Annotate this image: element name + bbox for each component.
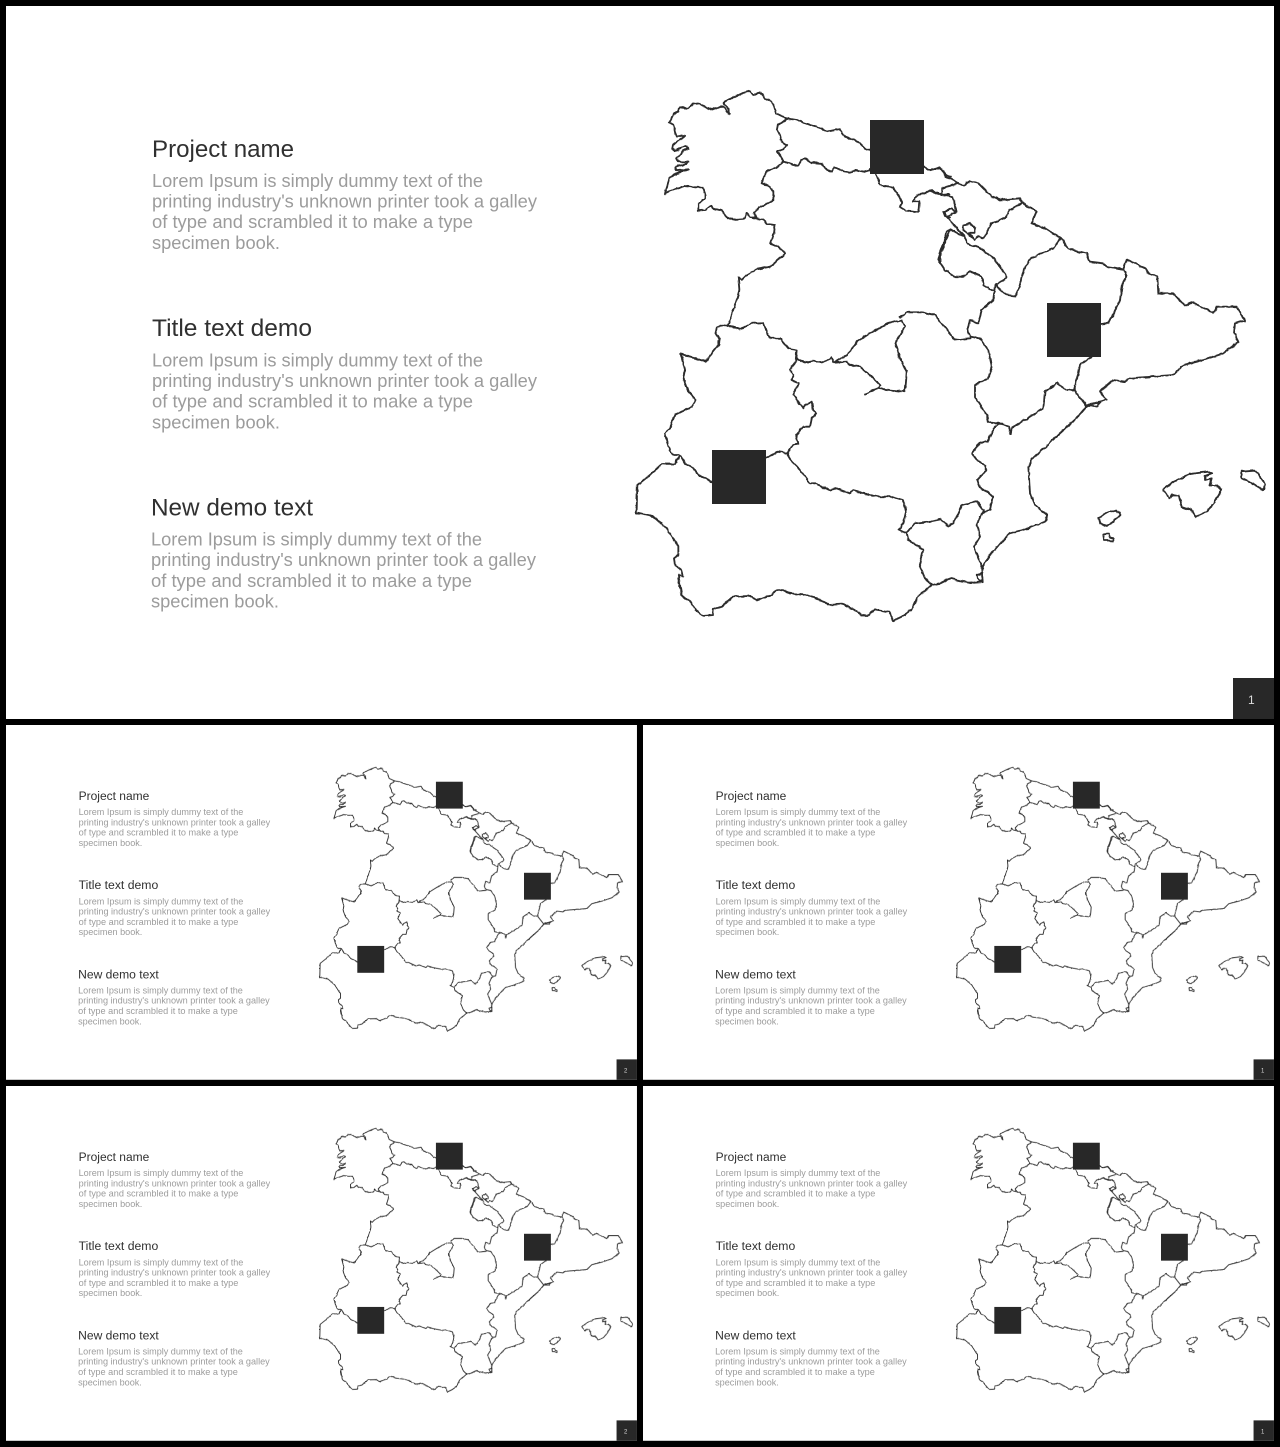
marker square north — [436, 1143, 463, 1170]
text block: new demo text: specimen book. — [78, 1016, 142, 1026]
marker square east — [1047, 303, 1101, 357]
text block: new demo text: printing industry's unknown printer took a galley — [715, 996, 907, 1006]
marker square north — [1073, 1143, 1100, 1170]
text block: title text demo: Title text demo — [79, 1239, 159, 1253]
text block: project name: Lorem Ipsum is simply dummy text of the — [716, 1168, 880, 1178]
text block: new demo text: of type and scrambled it to make a type — [151, 571, 472, 591]
text block: new demo text: New demo text — [78, 968, 159, 982]
text block: project name: Lorem Ipsum is simply dummy text of the — [79, 1168, 243, 1178]
panel: small slide top right — [643, 725, 1274, 1080]
text block: project name: Project name — [716, 789, 787, 803]
text block: project name: Lorem Ipsum is simply dummy text of the — [716, 807, 880, 817]
text block: project name: printing industry's unknown printer took a galley — [716, 817, 908, 827]
text block: title text demo — [152, 315, 537, 432]
text block: title text demo: Title text demo — [716, 878, 796, 892]
page number badge — [1233, 678, 1274, 719]
text block: new demo text: New demo text — [78, 1329, 159, 1343]
text block: title text demo: of type and scrambled it to make a type — [152, 392, 473, 412]
text block: title text demo: of type and scrambled it to make a type — [79, 917, 238, 927]
text block: project name: specimen book. — [716, 1199, 779, 1209]
text block: new demo text: of type and scrambled it to make a type — [78, 1006, 238, 1016]
text block: title text demo: printing industry's unknown printer took a galley — [716, 1268, 908, 1278]
text block: title text demo: Title text demo — [152, 315, 312, 342]
map of Spain — [956, 767, 1269, 1031]
page number badge — [1254, 1059, 1274, 1080]
text block: project name: printing industry's unknown printer took a galley — [152, 192, 537, 212]
text block: title text demo: Title text demo — [79, 878, 159, 892]
text block: project name: specimen book. — [79, 838, 142, 848]
page number badge: 1 — [1261, 1068, 1265, 1074]
text block: project name: of type and scrambled it to make a type — [152, 212, 473, 232]
text block: project name: Project name — [716, 1150, 787, 1164]
text block: project name: printing industry's unknown printer took a galley — [79, 1178, 271, 1188]
text block: title text demo: of type and scrambled it to make a type — [716, 1278, 875, 1288]
text block: title text demo: printing industry's unknown printer took a galley — [79, 907, 271, 917]
text block: new demo text: of type and scrambled it to make a type — [78, 1367, 238, 1377]
text block: project name: printing industry's unknown printer took a galley — [716, 1178, 908, 1188]
text block: title text demo — [79, 878, 271, 937]
map of Spain — [319, 767, 632, 1031]
panel: main slide — [6, 6, 1274, 719]
text block: new demo text: specimen book. — [715, 1377, 779, 1387]
text block: new demo text: Lorem Ipsum is simply dummy text of the — [151, 530, 482, 550]
text block: new demo text — [78, 1329, 270, 1387]
text block: title text demo — [716, 1239, 908, 1298]
panel: small slide bottom left — [6, 1086, 637, 1441]
text block: project name: of type and scrambled it to make a type — [79, 827, 238, 837]
text block: title text demo: specimen book. — [716, 927, 779, 937]
text block: title text demo: Lorem Ipsum is simply dummy text of the — [79, 1257, 243, 1267]
marker square north — [870, 120, 924, 174]
marker square east — [524, 873, 551, 900]
marker square southwest — [994, 946, 1021, 973]
text block: new demo text: New demo text — [715, 968, 796, 982]
text block: project name: Project name — [79, 789, 150, 803]
text block: new demo text: Lorem Ipsum is simply dummy text of the — [715, 1346, 880, 1356]
text block: new demo text: printing industry's unknown printer took a galley — [78, 996, 270, 1006]
text block: new demo text: Lorem Ipsum is simply dummy text of the — [78, 1346, 243, 1356]
marker square southwest — [994, 1307, 1021, 1334]
page number badge: 2 — [624, 1429, 628, 1435]
text block: new demo text: specimen book. — [78, 1377, 142, 1387]
page number badge — [617, 1059, 637, 1080]
page number badge — [617, 1420, 637, 1441]
text block: project name: Project name — [152, 136, 294, 163]
text block: title text demo: printing industry's unknown printer took a galley — [716, 907, 908, 917]
text block: title text demo: of type and scrambled it to make a type — [79, 1278, 238, 1288]
text block: project name: Lorem Ipsum is simply dummy text of the — [152, 171, 483, 191]
text block: project name — [79, 789, 271, 848]
text block: title text demo: Title text demo — [716, 1239, 796, 1253]
text block: new demo text: Lorem Ipsum is simply dummy text of the — [715, 985, 880, 995]
text block: new demo text: specimen book. — [151, 592, 279, 612]
text block: new demo text: printing industry's unknown printer took a galley — [151, 550, 536, 570]
text block: new demo text: of type and scrambled it to make a type — [715, 1006, 875, 1016]
text block: project name — [79, 1150, 271, 1209]
marker square east — [1161, 873, 1188, 900]
text block: new demo text: of type and scrambled it to make a type — [715, 1367, 875, 1377]
marker square southwest — [712, 450, 766, 504]
text block: project name: specimen book. — [152, 233, 280, 253]
marker square north — [436, 782, 463, 809]
text block: title text demo — [79, 1239, 271, 1298]
text block: new demo text: New demo text — [151, 494, 313, 522]
text block: title text demo: specimen book. — [79, 1288, 142, 1298]
text block: new demo text: Lorem Ipsum is simply dummy text of the — [78, 985, 243, 995]
text block: title text demo: Lorem Ipsum is simply dummy text of the — [716, 1257, 880, 1267]
text block: title text demo: of type and scrambled it to make a type — [716, 917, 875, 927]
text block: title text demo: specimen book. — [716, 1288, 779, 1298]
text block: title text demo: Lorem Ipsum is simply dummy text of the — [152, 350, 483, 370]
text block: new demo text — [715, 1329, 907, 1387]
text block: project name — [152, 136, 537, 253]
marker square southwest — [357, 946, 384, 973]
page number badge: 1 — [1261, 1429, 1265, 1435]
text block: title text demo: printing industry's unknown printer took a galley — [152, 371, 537, 391]
page number badge: 2 — [624, 1068, 628, 1074]
text block: project name: Lorem Ipsum is simply dummy text of the — [79, 807, 243, 817]
page number badge: 1 — [1248, 693, 1255, 707]
page number badge — [1254, 1420, 1274, 1441]
marker square north — [1073, 782, 1100, 809]
text block: new demo text — [78, 968, 270, 1026]
map of Spain — [635, 91, 1265, 621]
map of Spain — [319, 1128, 632, 1392]
text block: project name — [716, 789, 908, 848]
text block: project name: of type and scrambled it to make a type — [716, 827, 875, 837]
text block: title text demo: printing industry's unknown printer took a galley — [79, 1268, 271, 1278]
panel: small slide bottom right — [643, 1086, 1274, 1441]
text block: new demo text — [715, 968, 907, 1026]
text block: project name: Project name — [79, 1150, 150, 1164]
text block: new demo text: printing industry's unknown printer took a galley — [78, 1357, 270, 1367]
text block: project name: of type and scrambled it to make a type — [716, 1188, 875, 1198]
panel: small slide top left — [6, 725, 637, 1080]
text block: new demo text: printing industry's unknown printer took a galley — [715, 1357, 907, 1367]
text block: title text demo — [716, 878, 908, 937]
text block: project name: specimen book. — [716, 838, 779, 848]
text block: title text demo: specimen book. — [152, 412, 280, 432]
marker square east — [524, 1234, 551, 1261]
text block: new demo text: New demo text — [715, 1329, 796, 1343]
text block: project name — [716, 1150, 908, 1209]
marker square southwest — [357, 1307, 384, 1334]
text block: project name: specimen book. — [79, 1199, 142, 1209]
text block: new demo text — [151, 494, 536, 612]
text block: title text demo: Lorem Ipsum is simply dummy text of the — [716, 896, 880, 906]
text block: title text demo: specimen book. — [79, 927, 142, 937]
text block: project name: printing industry's unknown printer took a galley — [79, 817, 271, 827]
text block: new demo text: specimen book. — [715, 1016, 779, 1026]
text block: title text demo: Lorem Ipsum is simply dummy text of the — [79, 896, 243, 906]
text block: project name: of type and scrambled it to make a type — [79, 1188, 238, 1198]
marker square east — [1161, 1234, 1188, 1261]
map of Spain — [956, 1128, 1269, 1392]
